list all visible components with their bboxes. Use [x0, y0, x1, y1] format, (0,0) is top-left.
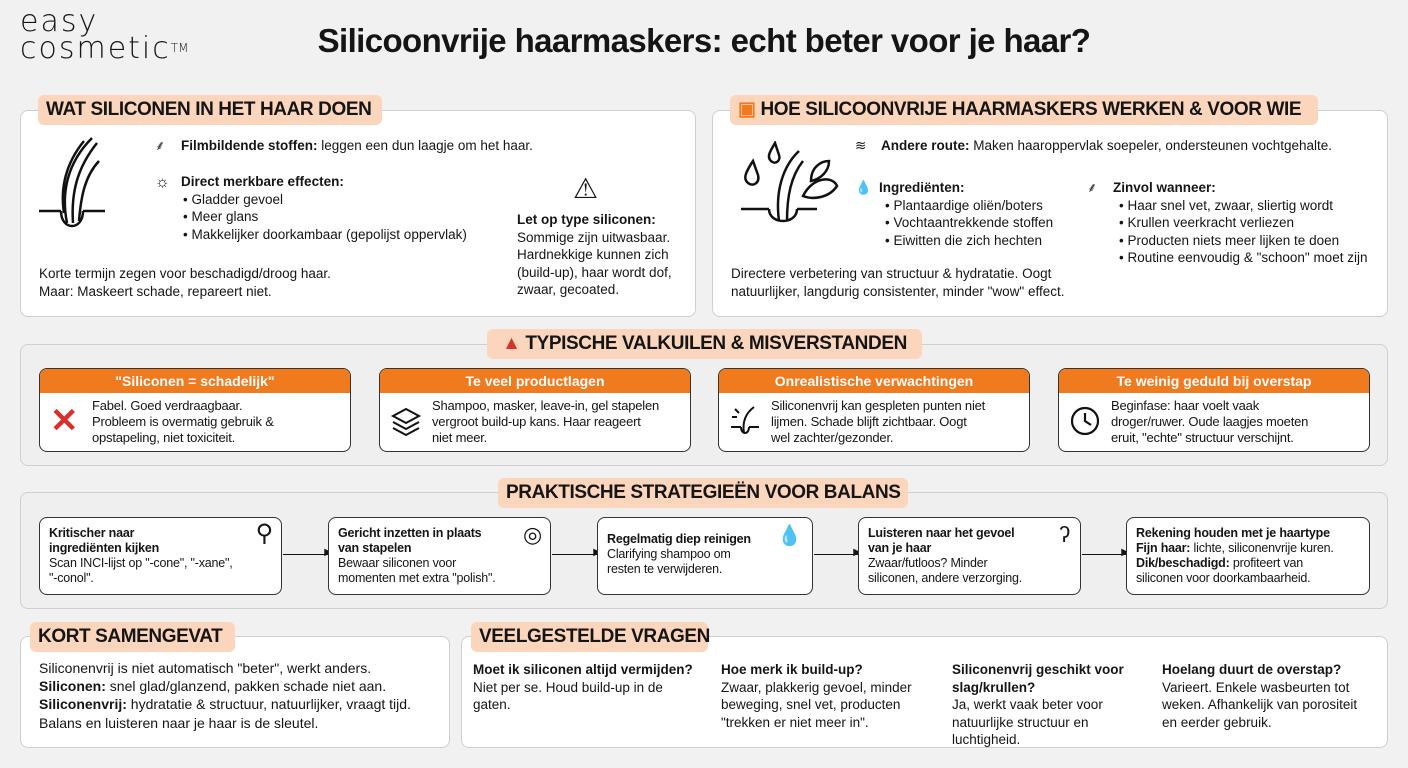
text: samenvatting: Siliconenvrij is niet automatisch "beter", werkt anders. [39, 660, 371, 676]
heading: strategieen: PRAKTISCHE STRATEGIEËN VOOR BALANS [506, 482, 901, 503]
card: schadelijk: Fabel. Goed verdraagbaar. [92, 398, 242, 413]
text: let op: Sommige zijn uitwasbaar. Hardnekkige kunnen zich (build-up), haar wordt dof, zwaar, gecoated. [517, 230, 672, 297]
heading: wat siliconen: WAT SILICONEN IN HET HAAR DOEN [46, 99, 371, 120]
panel: strategieen: ▶ [853, 547, 861, 558]
card: ingredienten: "-conol". [49, 571, 94, 585]
card: haartype [1126, 517, 1370, 595]
faq 1: Niet per se. Houd build-up in de gaten. [473, 680, 663, 712]
card: ingredienten [39, 517, 282, 595]
card: gericht: ◎ [523, 522, 542, 547]
card: schadelijk: Probleem is overmatig gebruik & [92, 414, 274, 429]
icon: drops and leaves [741, 141, 838, 222]
text: andere route: Andere route: Maken haaroppervlak soepeler, ondersteunen vochtgehalte. [881, 138, 1332, 153]
arrow [552, 554, 598, 555]
card: geduld: Beginfase: haar voelt vaak [1111, 398, 1259, 413]
text: zinvol wanneer: • Krullen veerkracht verliezen [1119, 215, 1294, 230]
card: gericht [328, 517, 551, 595]
card: verwachtingen: lijmen. Schade blijft zichtbaar. Oogt [771, 414, 967, 429]
card: luisteren: ʔ [1059, 522, 1070, 547]
text: samenvatting [39, 660, 411, 731]
panel: hoe werken: ⸙ [1087, 180, 1097, 195]
text: effecten [155, 174, 467, 242]
card: schadelijk: opstapeling, niet toxiciteit. [92, 430, 235, 445]
faq 1 [473, 662, 693, 712]
faq 3 [952, 662, 1124, 747]
card: productlagen: vergroot build-up kans. Haar reageert [432, 414, 641, 429]
arrow [283, 554, 329, 555]
text: let op: Let op type siliconen: [517, 212, 656, 227]
card: verwachtingen: wel zachter/gezonder. [771, 430, 893, 445]
card: luisteren: siliconen, andere verzorging. [868, 571, 1022, 585]
card: gericht: Gericht inzetten in plaats [338, 526, 481, 540]
logo: cosmeticTM [20, 31, 188, 66]
logo [20, 4, 188, 66]
card: luisteren: van je haar [868, 541, 931, 555]
text: korte termijn: Maar: Maskeert schade, repareert niet. [39, 284, 272, 299]
card: reinigen: Clarifying shampoo om [607, 547, 731, 561]
card: ingredienten: ⚲ [256, 520, 273, 547]
text: zinvol wanneer: • Haar snel vet, zwaar, sliertig wordt [1119, 198, 1333, 213]
text: samenvatting: Balans en luisteren naar je haar is de sleutel. [39, 715, 318, 731]
text: directere verbetering: Directere verbetering van structuur & hydratatie. Oogt natuurlijker, langdurig consistenter, minder "wow" effect. [731, 266, 1065, 299]
card: haartype: Rekening houden met je haartype [1136, 526, 1330, 540]
text: ingredienten: • Eiwitten die zich hechten [885, 233, 1042, 248]
card: gericht: Bewaar siliconen voor [338, 556, 456, 570]
arrow [814, 554, 858, 555]
text: samenvatting: Siliconenvrij: hydratatie & structuur, natuurlijker, vraagt tijd. [39, 696, 411, 712]
panel: hoe werken [712, 110, 1388, 317]
faq 2: Zwaar, plakkerig gevoel, minder beweging, snel vet, producten "trekken er niet meer in". [721, 680, 912, 730]
panel: samengevat [20, 636, 450, 748]
card: productlagen: niet meer. [432, 430, 487, 445]
text: ingredienten [855, 180, 1053, 248]
panel: hoe werken: 💧 [855, 180, 872, 195]
text: zinvol wanneer: • Producten niets meer lijken te doen [1119, 233, 1339, 248]
heading: hoe werken: ▣ HOE SILICOONVRIJE HAARMASKERS WERKEN & VOOR WIE [738, 99, 1301, 120]
card: reinigen [597, 517, 813, 595]
card: verwachtingen [718, 368, 1030, 452]
heading: valkuilen: ▲ TYPISCHE VALKUILEN & MISVERSTANDEN [502, 333, 907, 354]
panel: strategieen: ▶ [593, 547, 601, 558]
card: ingredienten: Scan INCI-lijst op "-cone", "-xane", [49, 556, 233, 570]
card: productlagen [379, 368, 691, 452]
heading: strategieen [498, 478, 908, 508]
card: ingredienten: Kritischer naar [49, 526, 134, 540]
text: effecten: • Makkelijker doorkambaar (gepolijst oppervlak) [183, 227, 467, 242]
card: geduld: eruit, "echte" structuur verschijnt. [1111, 430, 1294, 445]
card: haartype: siliconen voor doorkambaarheid. [1136, 571, 1310, 585]
card: reinigen: resten te verwijderen. [607, 562, 722, 576]
heading: faq: VEELGESTELDE VRAGEN [479, 626, 710, 647]
card: productlagen: Shampoo, masker, leave-in, gel stapelen [432, 398, 659, 413]
text: ingredienten: • Vochtaantrekkende stoffen [885, 215, 1053, 230]
faq 4: Varieert. Enkele wasbeurten tot weken. Afhankelijk van porositeit en eerder gebruik. [1162, 680, 1357, 730]
panel: wat siliconen doen: ⸙ [155, 138, 165, 153]
arrow [1082, 554, 1126, 555]
card: schadelijk [39, 368, 351, 452]
card: geduld: droger/ruwer. Oude laagjes moeten [1111, 414, 1308, 429]
heading: samengevat [30, 622, 235, 652]
card: haartype: Fijn haar: lichte, siliconenvrije kuren. [1136, 541, 1334, 555]
icon: warning: ⚠ [573, 173, 598, 204]
card: productlagen: Te veel productlagen [466, 373, 604, 389]
faq 2: Hoe merk ik build-up? [721, 662, 863, 677]
card: geduld: Te weinig geduld bij overstap [1116, 373, 1312, 389]
text: ingredienten: • Plantaardige oliën/boters [885, 198, 1043, 213]
card: schadelijk: "Siliconen = schadelijk" [115, 373, 275, 389]
heading: wat siliconen [38, 95, 382, 125]
heading: valkuilen [487, 329, 922, 359]
panel: valkuilen [20, 344, 1388, 466]
faq 4: Hoelang duurt de overstap? [1162, 662, 1341, 677]
card: reinigen: Regelmatig diep reinigen [607, 532, 751, 546]
card: geduld [1058, 368, 1370, 452]
panel: strategieen: ▶ [1121, 547, 1129, 558]
card: verwachtingen: Siliconenvrij kan gespleten punten niet [771, 398, 985, 413]
faq 1: Moet ik siliconen altijd vermijden? [473, 662, 693, 677]
card: luisteren [858, 517, 1081, 595]
text: ingredienten: Ingrediënten: [879, 180, 965, 195]
card: reinigen: 💧 [777, 525, 802, 547]
text: samenvatting: Siliconen: snel glad/glanzend, pakken schade niet aan. [39, 678, 386, 694]
card: luisteren: Zwaar/futloos? Minder [868, 556, 987, 570]
card: ingredienten: ingrediënten kijken [49, 541, 159, 555]
text: effecten: • Meer glans [183, 209, 258, 224]
card: haartype: Dik/beschadigd: profiteert van [1136, 556, 1303, 570]
heading: samengevat: KORT SAMENGEVAT [38, 626, 222, 647]
heading: hoe werken [730, 95, 1318, 125]
logo: easy [20, 4, 98, 39]
card: schadelijk: ✕ [50, 402, 78, 440]
text: zinvol wanneer: • Routine eenvoudig & "schoon" moet zijn [1119, 250, 1367, 265]
panel: strategieen: ▶ [324, 547, 332, 558]
text: korte termijn: Korte termijn zegen voor beschadigd/droog haar. [39, 266, 331, 281]
panel: hoe werken: ≋ [855, 138, 866, 153]
text: korte termijn [39, 266, 331, 299]
panel: wat siliconen doen [20, 110, 696, 317]
icon: hair follicle [39, 137, 105, 228]
card: gericht: momenten met extra "polish". [338, 571, 496, 585]
card: luisteren: Luisteren naar het gevoel [868, 526, 1014, 540]
faq 3: Siliconenvrij geschikt voor slag/krullen? [952, 662, 1124, 695]
heading: faq [471, 622, 708, 652]
card: gericht: van stapelen [338, 541, 411, 555]
panel: faq [461, 636, 1388, 748]
panel: strategieen [20, 492, 1388, 609]
faq 3: Ja, werkt vaak beter voor natuurlijke structuur en luchtigheid. [952, 697, 1103, 747]
text: filmbildende: Filmbildende stoffen: leggen een dun laagje om het haar. [181, 138, 533, 153]
text: zinvol wanneer: Zinvol wanneer: [1113, 180, 1216, 195]
panel: wat siliconen doen: ☼ [155, 174, 170, 191]
title: Silicoonvrije haarmaskers: echt beter voor je haar? [318, 22, 1090, 59]
text: effecten: Direct merkbare effecten: [181, 174, 344, 189]
card: verwachtingen: Onrealistische verwachtingen [775, 373, 973, 389]
text: effecten: • Gladder gevoel [183, 192, 283, 207]
text: zinvol wanneer [1087, 180, 1367, 265]
